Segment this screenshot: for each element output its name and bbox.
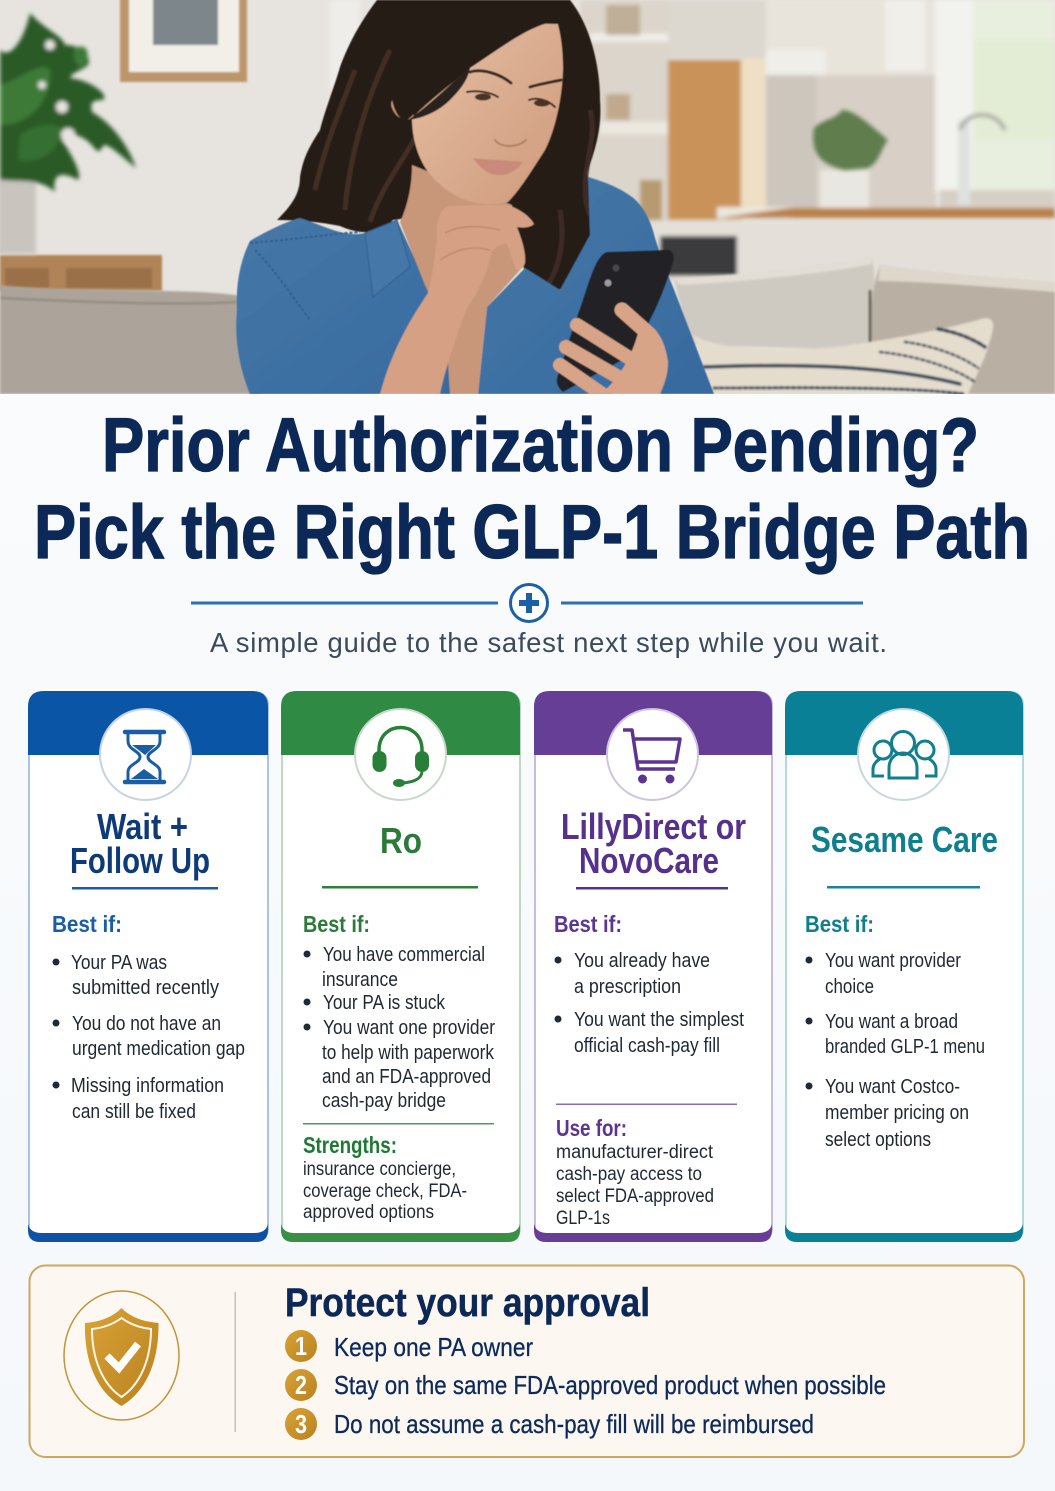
panel: wait + follow up (28, 691, 268, 1242)
card heading: Follow Up (70, 840, 210, 881)
best if list: official cash-pay fill (574, 1035, 720, 1057)
best if list: You want Costco- (825, 1076, 960, 1098)
hand under chin and forearm (380, 205, 534, 394)
use for (556, 1115, 714, 1229)
hair strands over temple (391, 80, 455, 120)
console (0, 255, 162, 291)
best if list: can still be fixed (72, 1101, 196, 1123)
step 1: 1 (295, 1331, 307, 1361)
step 2: Stay on the same FDA-approved product when possible (334, 1370, 886, 1400)
best if list: You have commercial (323, 944, 485, 966)
panel: lillydirect or novocare (534, 691, 772, 1242)
strengths: coverage check, FDA- (303, 1181, 467, 1202)
phone (557, 250, 674, 392)
hair back (277, 0, 603, 294)
best if list: Best if: (52, 911, 122, 937)
icon: group of people (858, 709, 949, 800)
panel: sesame care (785, 691, 1023, 1242)
use for: cash-pay access to (556, 1164, 702, 1185)
card heading (561, 806, 746, 881)
shirt (236, 217, 451, 394)
step 1: Keep one PA owner (334, 1332, 533, 1362)
left plant and vase (0, 13, 136, 254)
best if list: You want one provider (323, 1017, 495, 1039)
use for: GLP-1s (556, 1208, 610, 1229)
panel: protect your approval (30, 1266, 1024, 1457)
best if list: You want provider (825, 950, 961, 972)
hero photo: woman on sofa looking at phone (0, 0, 1055, 396)
card heading: Ro (380, 820, 422, 861)
best if list: and an FDA-approved (322, 1066, 491, 1088)
panel: ro (281, 691, 520, 1242)
best if list (554, 911, 744, 1057)
best if list: urgent medication gap (72, 1038, 245, 1060)
best if list: Best if: (805, 911, 874, 937)
best if list: submitted recently (72, 977, 219, 999)
chest and neck (400, 165, 520, 394)
best if list (52, 911, 245, 1123)
icon: headset (355, 709, 446, 800)
picture frame (120, 0, 247, 82)
strengths: approved options (303, 1202, 434, 1223)
card heading: LillyDirect or (561, 806, 746, 847)
card heading: NovoCare (579, 840, 719, 881)
strengths: insurance concierge, (303, 1159, 456, 1180)
icon: shield with check (64, 1291, 179, 1420)
card heading (70, 806, 210, 881)
panel heading: Protect your approval (285, 1281, 650, 1325)
card heading: Sesame Care (811, 819, 998, 860)
icon: hourglass (100, 709, 191, 800)
strengths (303, 1132, 467, 1223)
best if list: Missing information (71, 1075, 224, 1097)
best if list: choice (825, 976, 874, 998)
best if list: Best if: (554, 911, 622, 937)
best if list: member pricing on (825, 1102, 969, 1124)
use for: Use for: (556, 1115, 627, 1141)
use for: select FDA-approved (556, 1186, 714, 1207)
best if list (303, 911, 495, 1112)
best if list: to help with paperwork (322, 1042, 495, 1064)
strengths: Strengths: (303, 1132, 397, 1158)
step 3: 3 (295, 1409, 307, 1439)
sofa and cushions (0, 256, 1055, 394)
subtitle: A simple guide to the safest next step while you wait. (210, 627, 887, 658)
hand holding phone (560, 310, 650, 396)
best if list: insurance (322, 969, 398, 991)
best if list: a prescription (574, 976, 681, 998)
step 2: 2 (295, 1370, 307, 1400)
background plant right (813, 110, 888, 170)
ear (390, 100, 414, 120)
card heading: Wait + (97, 806, 188, 847)
best if list: Best if: (303, 911, 370, 937)
divider with plus icon (191, 584, 863, 622)
best if list: cash-pay bridge (322, 1090, 446, 1112)
best if list: select options (825, 1129, 931, 1151)
best if list: You already have (574, 950, 710, 972)
best if list: branded GLP-1 menu (825, 1036, 985, 1058)
step 3: Do not assume a cash-pay fill will be reimbursed (334, 1409, 814, 1439)
title (34, 403, 1030, 575)
best if list: You do not have an (72, 1013, 221, 1035)
icon: shopping cart (607, 709, 698, 800)
step 1 (285, 1330, 533, 1362)
best if list: You want the simplest (574, 1009, 744, 1031)
best if list (805, 911, 985, 1151)
best if list: You want a broad (825, 1011, 958, 1033)
eyes, brows, nose, mouth (467, 71, 561, 146)
woman (236, 0, 714, 396)
best if list: Your PA was (71, 952, 167, 974)
face (412, 21, 563, 204)
use for: manufacturer-direct (556, 1142, 714, 1163)
best if list: Your PA is stuck (323, 992, 446, 1014)
